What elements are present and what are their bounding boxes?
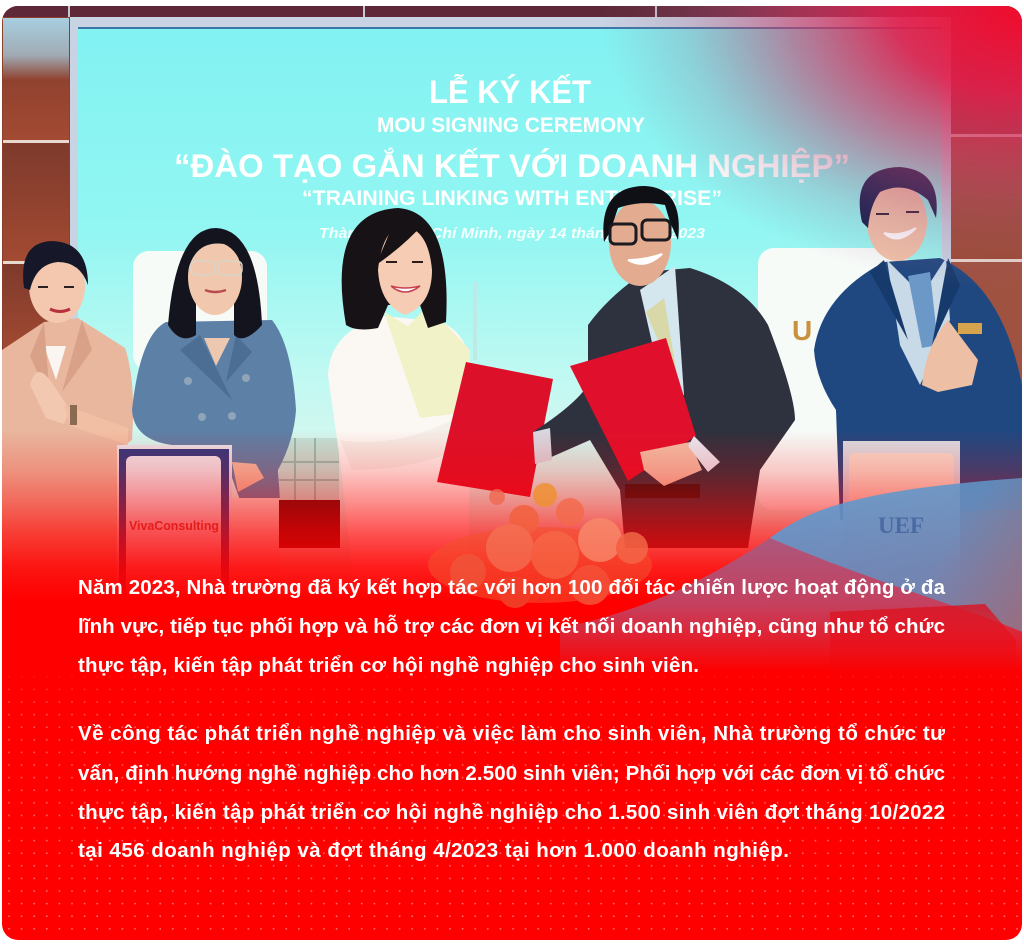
- award base: [279, 500, 340, 548]
- logo plaque: UEF: [843, 441, 960, 528]
- plaque logo text: UEF: [878, 513, 924, 538]
- screen skyline graphics: [279, 282, 477, 500]
- body paragraph 2: thực tập, kiến tập phát triển cơ hội nghề nghiệp cho 1.500 sinh viên đợt tháng 10/2022: [78, 801, 945, 824]
- person: woman in white jacket: [328, 208, 470, 532]
- screen title: “TRAINING LINKING WITH ENTERPRISE”: [302, 187, 722, 210]
- screen title: “ĐÀO TẠO GẮN KẾT VỚI DOANH NGHIỆP”: [174, 148, 850, 184]
- screen title: [174, 74, 850, 210]
- screen logo panels: U: [792, 315, 812, 346]
- person: man in dark suit: [533, 186, 795, 548]
- person: woman in pink blazer: [2, 241, 133, 600]
- flower arrangement: [428, 483, 652, 608]
- screen logo panels: [133, 248, 908, 510]
- screen title: LỄ KÝ KẾT: [429, 74, 591, 110]
- man's hand on folder: [640, 436, 720, 486]
- body paragraph 1: thực tập, kiến tập phát triển cơ hội nghề nghiệp cho sinh viên.: [78, 654, 699, 677]
- body paragraph 2: Về công tác phát triển nghề nghiệp và việc làm cho sinh viên, Nhà trường tổ chức tư: [78, 722, 945, 745]
- wave: blue swoosh: [770, 478, 1022, 632]
- dot pattern: [2, 670, 1022, 940]
- body paragraph 2: [78, 722, 945, 862]
- screen title: MOU SIGNING CEREMONY: [377, 114, 645, 137]
- red folder left: [437, 362, 553, 497]
- projection screen: [78, 27, 942, 546]
- screen date: Thành phố Hồ Chí Minh, ngày 14 tháng 6 năm 2023: [319, 225, 706, 242]
- body paragraph 1: Năm 2023, Nhà trường đã ký kết hợp tác với hơn 100 đối tác chiến lược hoạt động ở đa: [78, 576, 946, 599]
- logo plaque: Viva Consulting: [117, 445, 232, 600]
- body paragraph 2: tại 456 doanh nghiệp và đợt tháng 4/2023 tại hơn 1.000 doanh nghiệp.: [78, 839, 789, 862]
- table base behind overlay: [985, 585, 1022, 635]
- wave: pink wedge: [560, 538, 1022, 672]
- red corner glow: [623, 6, 1022, 272]
- red folder right: [570, 338, 696, 481]
- body paragraph 1: lĩnh vực, tiếp tục phối hợp và hỗ trợ các đơn vị kết nối doanh nghiệp, cũng như tổ chức: [78, 614, 945, 638]
- person: man in navy suit: [814, 167, 1022, 520]
- red gradient overlay: [2, 430, 1022, 605]
- red cloth on table: [830, 604, 1016, 646]
- body paragraph 2: vấn, định hướng nghề nghiệp cho hơn 2.500 sinh viên; Phối hợp với các đơn vị tổ chức: [78, 762, 945, 785]
- logo plaque: Viva Consulting: VivaConsulting: [129, 518, 219, 533]
- solid red below gradient: [2, 600, 1022, 940]
- person: woman in blue-grey blazer: [132, 228, 296, 518]
- body paragraph 1: [78, 576, 946, 677]
- photo: wall background: [2, 6, 1022, 536]
